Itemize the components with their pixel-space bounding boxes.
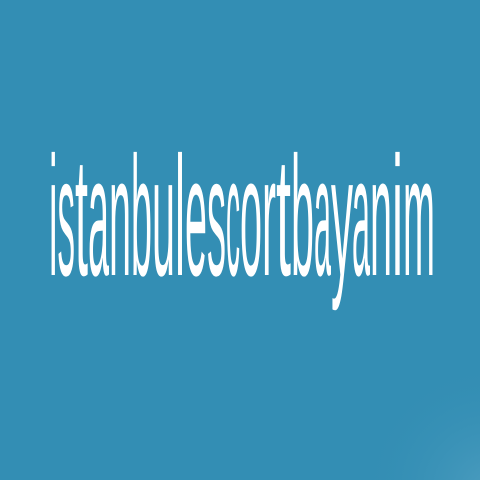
title: s — [58, 122, 75, 312]
title: t — [75, 122, 88, 312]
title: y — [331, 122, 353, 312]
title: t — [276, 122, 291, 312]
title: s — [207, 122, 226, 312]
title: b — [131, 122, 152, 312]
title: i — [49, 122, 58, 312]
title: n — [109, 122, 131, 312]
title: u — [152, 122, 175, 312]
title: e — [185, 122, 207, 312]
title: o — [240, 122, 262, 312]
title: r — [262, 122, 276, 312]
title: i — [392, 122, 403, 312]
title: n — [370, 122, 392, 312]
title: a — [352, 122, 370, 312]
title: a — [88, 122, 109, 312]
title: c — [226, 122, 240, 312]
title: a — [314, 122, 331, 312]
title: b — [291, 122, 314, 312]
title: l — [175, 122, 185, 312]
